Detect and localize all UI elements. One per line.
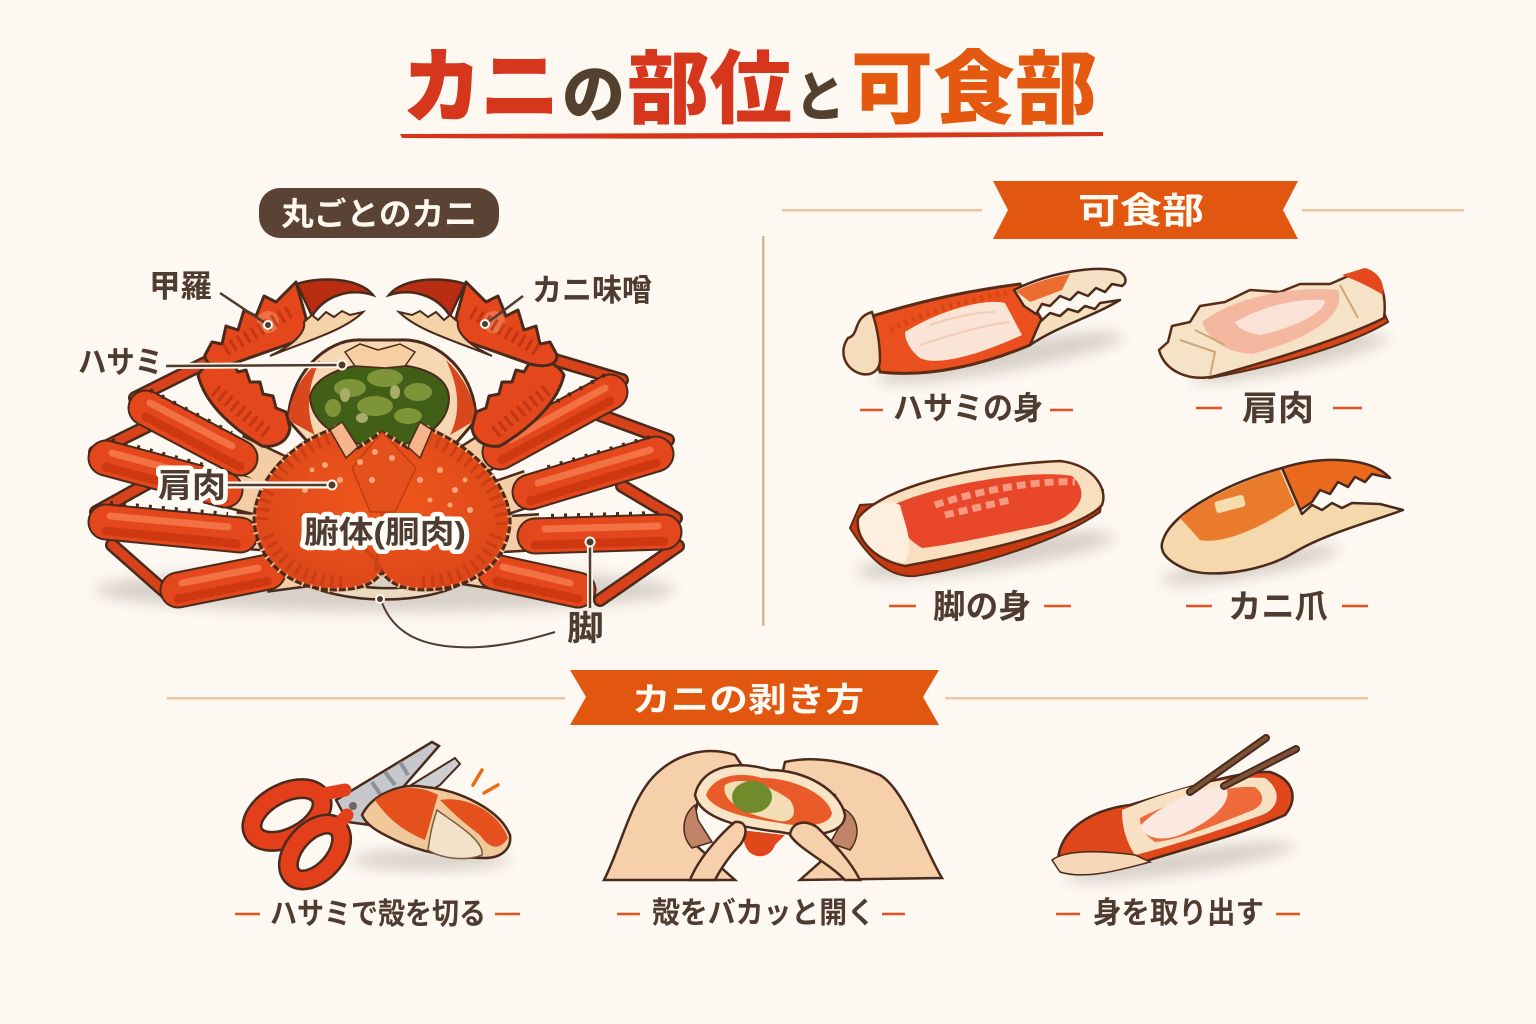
title: と: [795, 68, 845, 128]
item: claw meat: [843, 269, 1126, 393]
item label: crab pincer: カニ爪: [1228, 588, 1328, 625]
item: leg meat: [850, 461, 1116, 589]
section banner: how to peel: カニの剥き方: [632, 681, 864, 718]
step 1 label: ハサミで殻を切る: [270, 898, 486, 931]
item label: shoulder meat: 肩肉: [1242, 390, 1314, 428]
crab label: 甲羅: [149, 269, 272, 329]
crab miso: [310, 364, 449, 448]
step 2 label: 殻をバカッと開く: [652, 897, 875, 930]
thin leg segments: [95, 358, 678, 600]
under shell: [295, 560, 470, 600]
section pill: whole crab: 丸ごとのカニ: [281, 196, 477, 232]
title: 部位: [627, 45, 792, 134]
crab label: 甲羅: 甲羅: [149, 269, 212, 304]
title: [400, 43, 1103, 139]
item label: leg meat: 脚の身: [933, 588, 1031, 625]
section banner: edible parts: 可食部: [1078, 190, 1204, 231]
left claw: [198, 279, 373, 446]
crab label: 肩肉: [158, 467, 336, 504]
section banner: edible parts: [782, 181, 1464, 239]
section pill: whole crab: [259, 188, 499, 238]
carapace: [254, 428, 510, 590]
item label: claw meat: ハサミの身: [893, 390, 1043, 426]
section banner: how to peel: [167, 670, 1368, 725]
scissor blades: [336, 742, 460, 825]
crab label: 腑体(胴肉): 腑体(胴肉): [304, 515, 466, 550]
cream leg joints: [222, 440, 540, 574]
crab label: ハサミ: [78, 345, 346, 380]
cut shell: [362, 786, 510, 858]
crab label: カニ味噌: カニ味噌: [532, 273, 652, 308]
step 3 label: 身を取り出す: [1093, 897, 1264, 930]
open back shell: [288, 340, 476, 450]
crab label: カニ味噌: [481, 273, 652, 328]
item: crab pincer: [1159, 460, 1403, 592]
step 3: taking out meat with chopsticks: [1052, 738, 1296, 890]
step 1: scissors and shell: [243, 742, 510, 890]
thick leg segments: [106, 375, 664, 599]
title: の: [562, 59, 625, 131]
title: 可食部: [851, 45, 1097, 134]
scissor handles: [243, 778, 352, 890]
vertical divider: [762, 236, 764, 626]
whole crab illustration: [95, 279, 678, 612]
crab label: 肩肉: 肩肉: [158, 467, 226, 504]
crab label: 脚: 脚: [567, 610, 604, 648]
step 2: hands opening shell: [604, 751, 942, 880]
item: shoulder meat: [1159, 268, 1391, 392]
title: カニ: [403, 43, 559, 132]
right claw: [389, 279, 564, 446]
crab label: 脚: [376, 538, 604, 648]
crab label: ハサミ: ハサミ: [78, 345, 163, 380]
